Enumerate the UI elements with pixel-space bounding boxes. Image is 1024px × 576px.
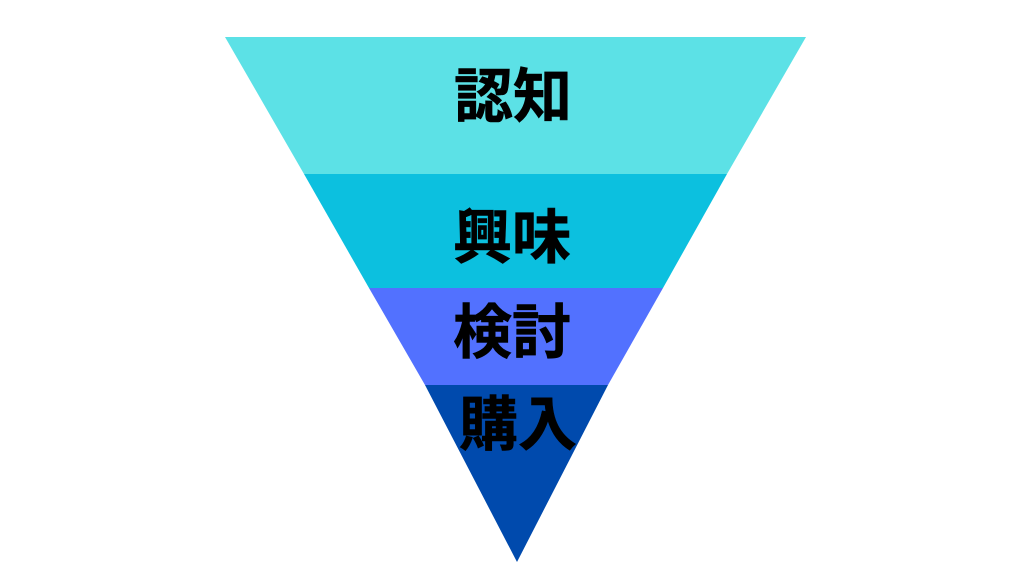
funnel tier: 興味: 興味 <box>453 205 571 271</box>
funnel tier: 購入 <box>425 385 608 562</box>
funnel tier: 購入: 購入 <box>459 392 577 458</box>
funnel tier: 検討 <box>369 288 663 385</box>
funnel tier: 認知 <box>225 37 806 174</box>
funnel tier: 検討: 検討 <box>453 300 571 366</box>
funnel tier: 認知: 認知 <box>454 64 572 130</box>
funnel tier: 興味 <box>304 174 727 288</box>
